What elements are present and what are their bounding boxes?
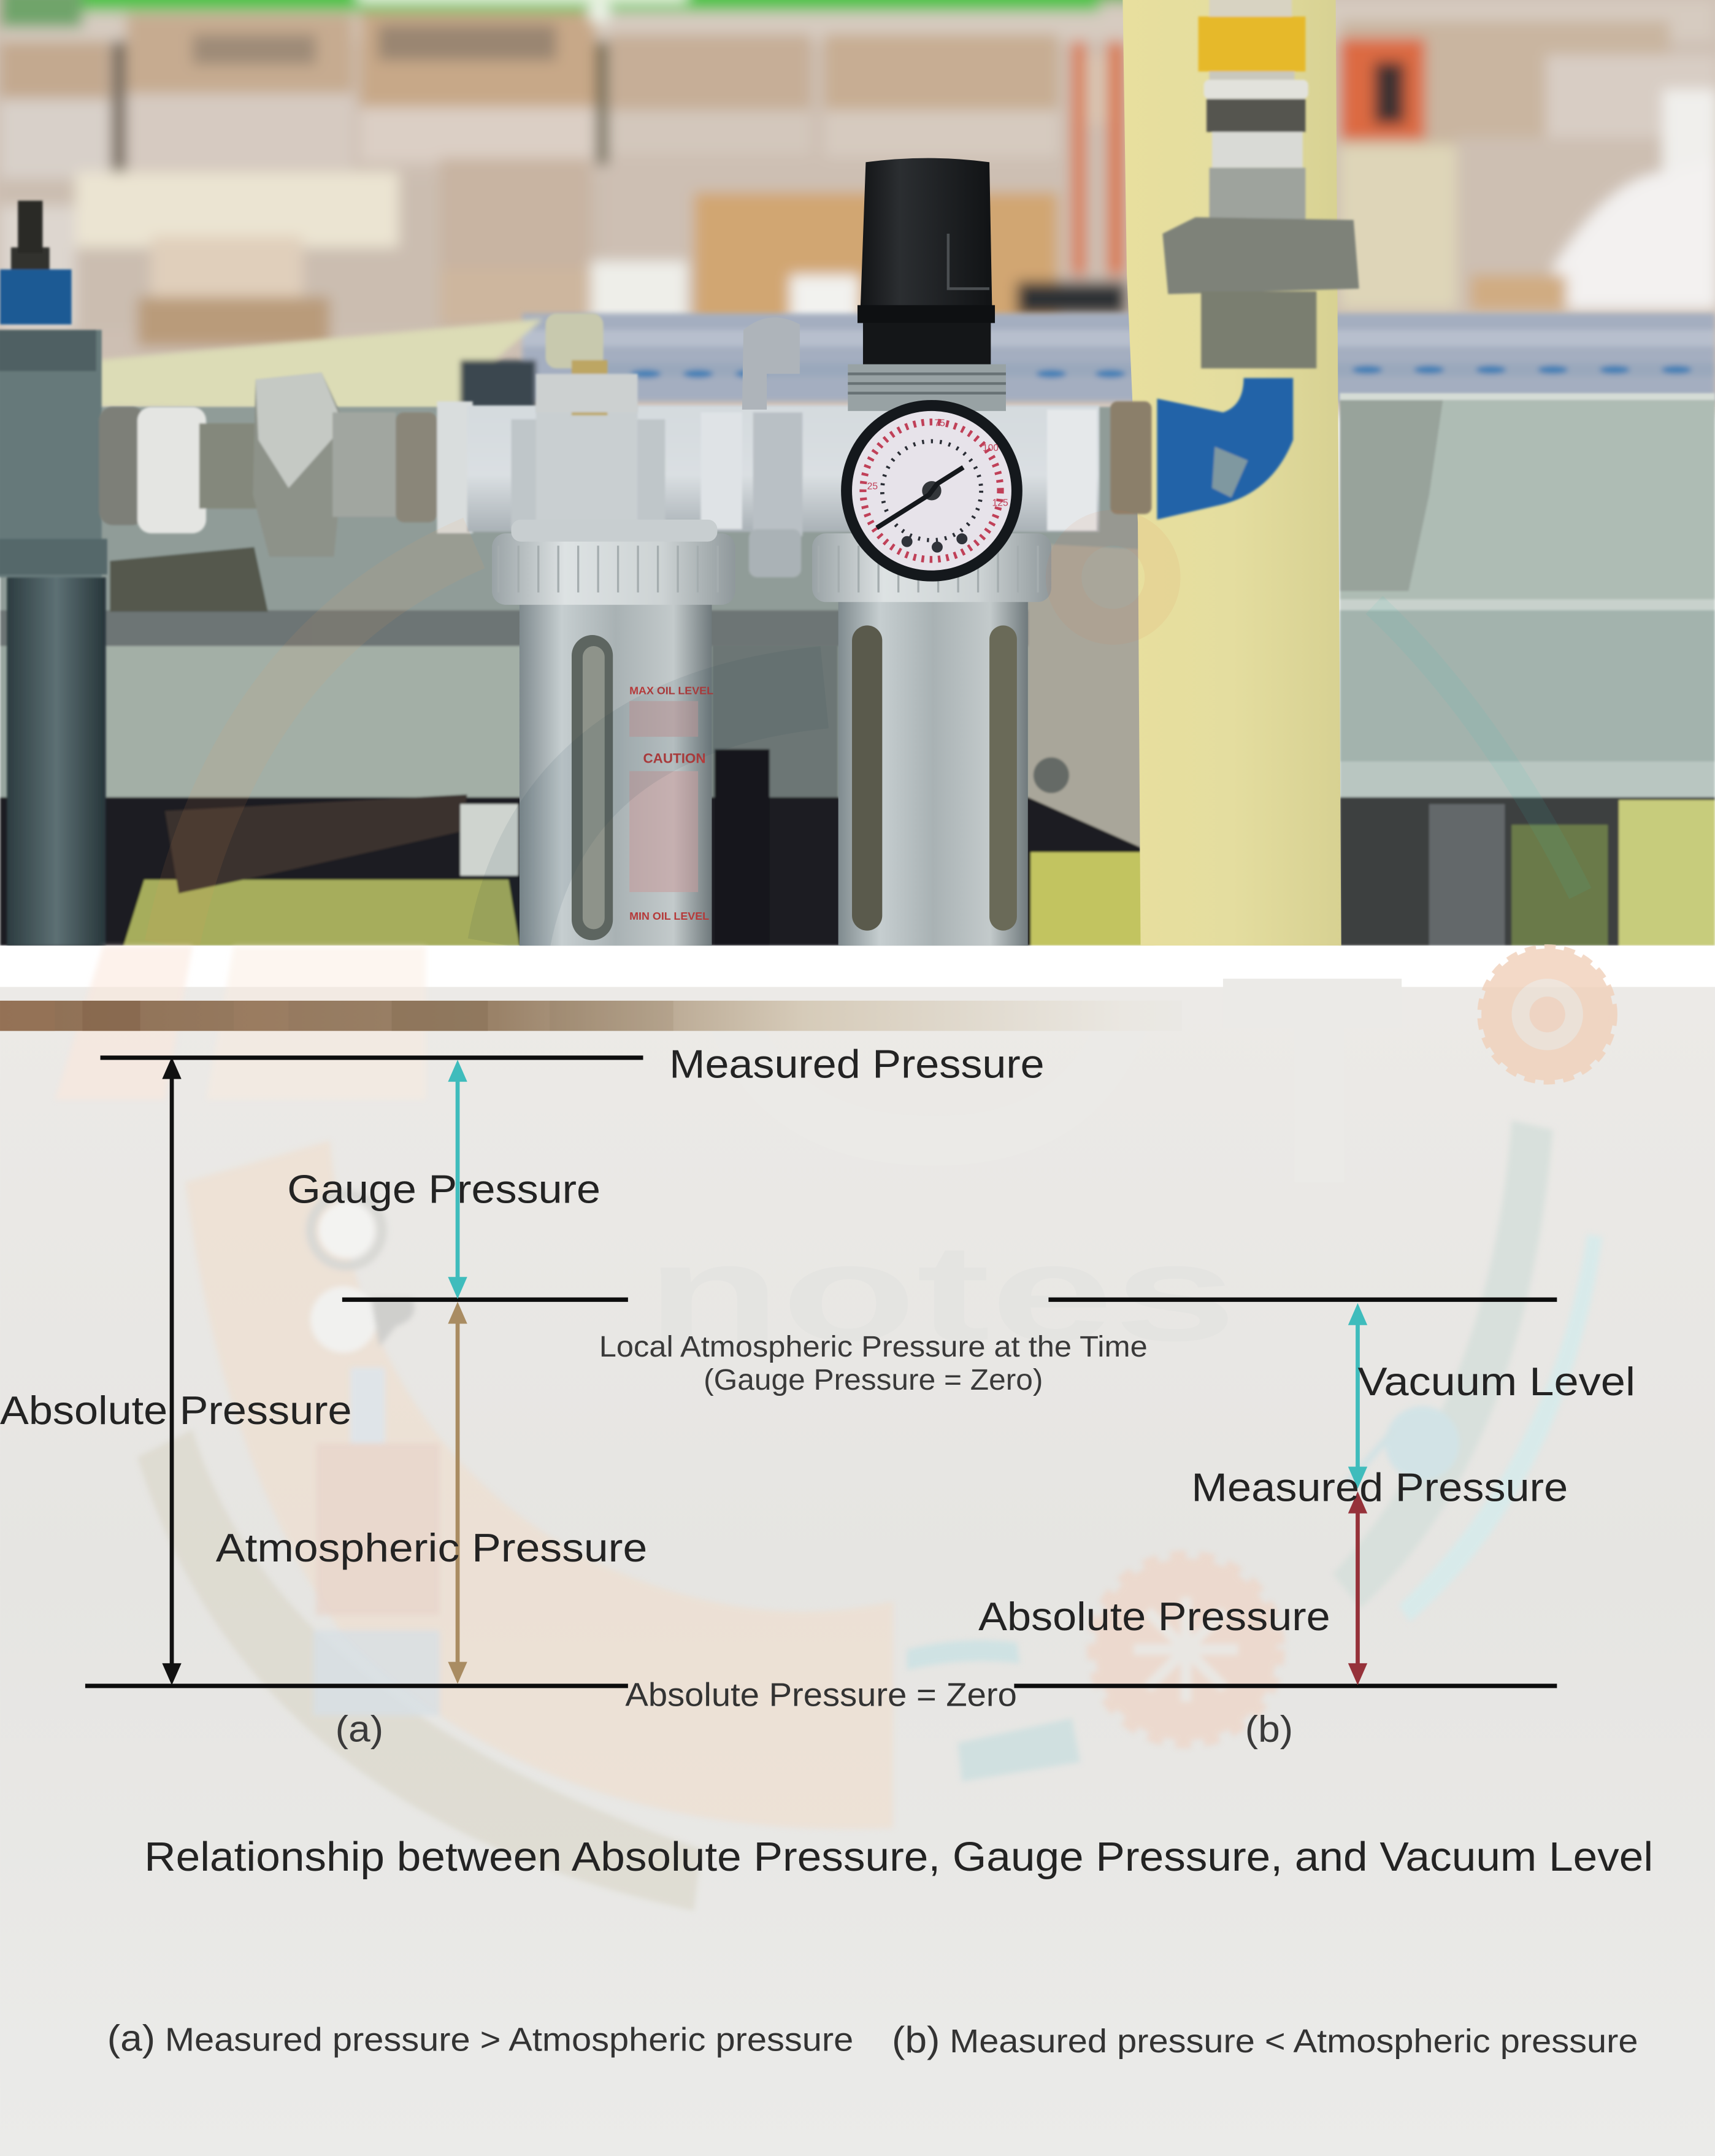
pressure gauge: 125	[992, 498, 1008, 508]
label: absolute pressure zero: Absolute Pressure = Zero	[625, 1676, 1017, 1713]
shared labels between charts	[599, 1330, 1148, 1713]
label: vacuum level: Vacuum Level	[1357, 1359, 1635, 1404]
pressure gauge	[841, 400, 1022, 582]
faint watermark over photo	[172, 528, 1580, 945]
chart (b): measured pressure below atmospheric	[978, 1299, 1635, 1750]
arrow: atmospheric pressure	[448, 1302, 467, 1684]
label: measured pressure: Measured Pressure	[1191, 1465, 1568, 1509]
watermark logo shapes	[55, 945, 1613, 1911]
faint notes lettering: notes	[646, 1216, 1237, 1369]
panel: pressure diagram	[0, 945, 1715, 2156]
label: local atmospheric pressure: Local Atmospheric Pressure at the Time	[599, 1330, 1148, 1363]
label: atmospheric pressure: Atmospheric Pressure	[216, 1525, 647, 1570]
fading brown band	[0, 1001, 1182, 1031]
pressure gauge: 25	[867, 482, 878, 492]
left steel beam	[0, 407, 1154, 945]
clear drain cap	[536, 314, 638, 415]
black adjustment knob	[848, 158, 1006, 411]
blurred warehouse background	[0, 0, 1715, 412]
caption title: Relationship between Absolute Pressure, Gauge Pressure, and Vacuum Level	[144, 1834, 1653, 1880]
label: absolute pressure: Absolute Pressure	[978, 1594, 1330, 1639]
left filter bowl: MIN OIL LEVEL	[629, 910, 709, 922]
label: measured pressure: Measured Pressure	[669, 1041, 1045, 1086]
gear watermark: top right	[1481, 949, 1613, 1080]
yellow column	[1122, 0, 1341, 945]
level line: absolute zero	[85, 1685, 628, 1687]
arrow: absolute pressure	[1348, 1492, 1367, 1685]
label: (a): (a)	[336, 1708, 383, 1750]
right steel beam	[1340, 393, 1715, 945]
left filter bowl: CAUTION	[643, 750, 706, 766]
right filter bowl	[812, 533, 1051, 949]
caption: condition (a): Measured pressure > Atmospheric pressure	[165, 2022, 853, 2058]
threaded fittings	[99, 372, 473, 556]
label: gauge pressure zero: (Gauge Pressure = Zero)	[704, 1363, 1043, 1396]
label: gauge pressure: Gauge Pressure	[287, 1166, 600, 1211]
pressure gauge: 75	[934, 418, 945, 429]
level line: atmospheric	[342, 1299, 628, 1301]
arrow: gauge pressure	[448, 1060, 467, 1299]
gear watermark: lower centre	[1095, 1559, 1276, 1740]
photo: pressure regulator on factory pipe	[0, 0, 1715, 949]
chart (a): measured pressure above atmospheric	[0, 1041, 1045, 1750]
blue elbow	[1157, 378, 1293, 520]
left filter bowl	[492, 520, 735, 949]
right pipe stack	[1157, 0, 1359, 520]
caption: condition (b): Measured pressure < Atmospheric pressure	[950, 2023, 1638, 2060]
caption: condition (a): (a)	[107, 2017, 155, 2059]
conveyor rail	[96, 314, 1715, 415]
level line: measured pressure	[101, 1057, 643, 1059]
regulator manifold	[467, 401, 1151, 577]
diagram background	[0, 987, 1715, 2156]
caption: condition (b): (b)	[892, 2019, 940, 2060]
left pipe and valve	[0, 201, 107, 945]
pressure gauge: 100	[983, 443, 999, 453]
label: (b): (b)	[1245, 1708, 1293, 1750]
label: absolute pressure: Absolute Pressure	[0, 1388, 352, 1433]
arrow: vacuum level	[1348, 1303, 1367, 1488]
level line: absolute zero	[1014, 1685, 1557, 1687]
left filter bowl: MAX OIL LEVEL	[629, 684, 713, 696]
arrow: absolute pressure	[162, 1057, 182, 1685]
hanging tab	[742, 317, 800, 410]
level line: atmospheric	[1048, 1299, 1557, 1301]
white strip between photo and diagram	[0, 945, 1715, 987]
